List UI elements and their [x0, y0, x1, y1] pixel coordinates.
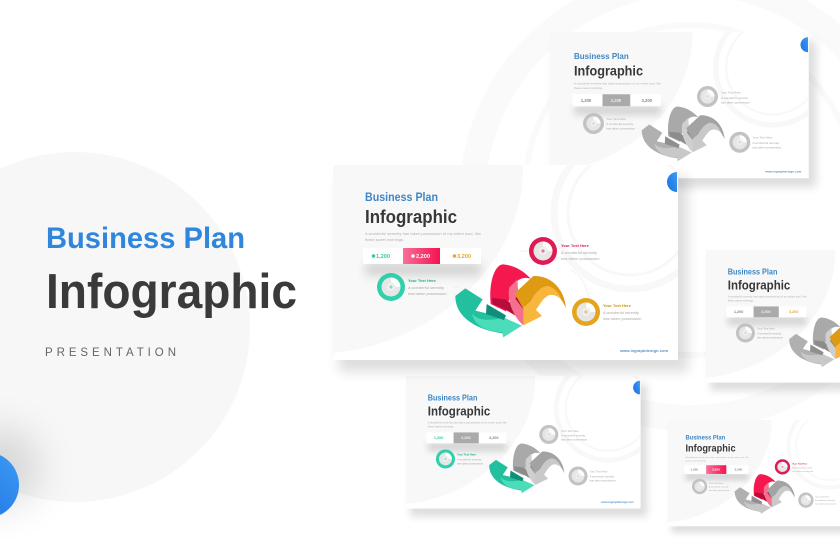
stat row: 2,200: [416, 254, 430, 260]
callout: green: Your Text Here: [408, 278, 437, 283]
callout left: [736, 323, 784, 342]
stat row: 3,200: [789, 310, 798, 314]
callout top: Your Text Here: [561, 429, 579, 433]
stat row: 2,200: [611, 98, 622, 103]
panel: slide thumbnail bottom right (red): [668, 405, 840, 533]
stat row: [363, 248, 481, 264]
callout left: [692, 479, 731, 494]
website: www.ingraphdesign.com: [764, 169, 802, 173]
callout left: has taken possession: [709, 489, 731, 492]
slide description: these sweet mornings.: [428, 425, 454, 429]
callout top: Your Text Here: [721, 90, 741, 95]
slide heading: [428, 393, 490, 418]
arrow graphic: [455, 264, 566, 337]
arrow graphic: [489, 444, 564, 493]
panel: slide thumbnail top right (grey): [550, 11, 830, 187]
website: www.ingraphdesign.com: [619, 348, 668, 353]
stat row: [426, 432, 507, 443]
slide description: these sweet mornings.: [728, 299, 754, 303]
callout: yellow: Your Text Here: [603, 303, 632, 308]
callout top: has taken possession: [561, 438, 588, 442]
callout top: Your Text Here: [792, 463, 808, 466]
callout: yellow: has taken possession: [603, 316, 641, 321]
slide heading: Infographic: [728, 278, 790, 292]
callout left: Your Text Here: [709, 482, 724, 485]
callout: green: [377, 273, 446, 301]
slide heading: [685, 435, 736, 455]
callout left: A wonderful serenity: [757, 331, 782, 335]
callout left: has taken possession: [457, 461, 484, 465]
stat row: 1,200: [581, 98, 592, 103]
callout left: Your Text Here: [606, 117, 626, 121]
callout top: [539, 425, 588, 444]
stat row: 1,200: [434, 436, 443, 440]
stat row: [572, 94, 661, 106]
slide description: these sweet mornings.: [365, 237, 404, 242]
stat row: 1,200: [734, 310, 743, 314]
arrow graphic: [735, 474, 795, 514]
heading: Business Plan: Business Plan: [46, 222, 245, 255]
callout top: has taken possession: [792, 470, 814, 473]
callout right: A wonderful serenity: [590, 474, 615, 478]
callout right: [798, 492, 837, 508]
callout right: Your Text Here: [752, 136, 773, 140]
panel: slide thumbnail middle right (yellow): [706, 231, 840, 391]
callout: yellow: [572, 298, 641, 326]
callout top: A wonderful serenity: [792, 467, 813, 470]
left panel backdrop circle: [0, 152, 250, 502]
callout: green: A wonderful serenity: [408, 285, 444, 290]
callout left: [583, 113, 635, 134]
callout: yellow: A wonderful serenity: [603, 310, 639, 315]
slide heading: [365, 192, 457, 227]
slide description: [365, 231, 481, 242]
slide heading: [728, 267, 790, 292]
stat row: 2,200: [712, 468, 720, 472]
callout right: Your Text Here: [590, 470, 608, 474]
stat row: 3,200: [489, 436, 498, 440]
callout left: has taken possession: [606, 126, 635, 131]
slide heading: Infographic: [574, 63, 643, 79]
callout left: [436, 449, 484, 468]
subtitle: PRESENTATION: PRESENTATION: [45, 347, 176, 359]
stat row: 1,200: [690, 468, 698, 472]
callout left: has taken possession: [757, 335, 784, 339]
callout: green: has taken possession: [408, 291, 446, 296]
slide description: A wonderful serenity has taken possession of my entire soul, like: [428, 421, 507, 425]
stat row: 2,200: [461, 436, 471, 440]
slide heading: Business Plan: [574, 51, 629, 61]
stat row: 3,200: [642, 98, 653, 103]
callout right: Your Text Here: [815, 495, 830, 498]
callout: red: has taken possession: [561, 256, 599, 261]
callout top: [697, 86, 750, 107]
callout right: has taken possession: [590, 478, 616, 482]
slide heading: Infographic: [365, 206, 457, 227]
arrow graphic: [789, 318, 840, 367]
heading: Infographic: Infographic: [46, 265, 297, 319]
slide heading: [574, 51, 643, 78]
blue corner circle with soft shadow: [0, 428, 40, 518]
slide heading: Business Plan: [428, 393, 478, 402]
slide description: A wonderful serenity has taken possession of my entire soul, like: [728, 295, 807, 299]
callout right: A wonderful serenity: [815, 499, 836, 502]
slide heading: Infographic: [685, 444, 736, 455]
slide description: [728, 295, 807, 303]
callout left: A wonderful serenity: [457, 457, 482, 461]
arrow graphic: [642, 106, 725, 161]
callout right: has taken possession: [752, 145, 782, 149]
callout right: A wonderful serenity: [752, 141, 780, 145]
callout: red: [529, 237, 599, 265]
website: www.ingraphdesign.com: [600, 500, 634, 504]
slide description: [428, 421, 507, 429]
callout top: has taken possession: [721, 100, 750, 104]
slide description: A wonderful serenity has taken possession of my entire soul, like: [574, 82, 661, 86]
slide heading: Business Plan: [685, 435, 725, 442]
callout left: Your Text Here: [457, 453, 476, 457]
slide description: [574, 82, 661, 90]
stat row: 3,200: [734, 468, 742, 472]
stat row: [726, 306, 807, 317]
stat row: 2,200: [761, 310, 771, 314]
slide heading: Business Plan: [728, 267, 778, 276]
callout right: [729, 132, 782, 153]
callout left: Your Text Here: [757, 327, 775, 331]
callout top: A wonderful serenity: [721, 96, 749, 100]
panel: slide thumbnail bottom centre (green): [406, 357, 660, 517]
stat row: 3,200: [457, 254, 471, 260]
stat row: 1,200: [376, 254, 390, 260]
callout left: A wonderful serenity: [606, 122, 634, 126]
stat row: [684, 465, 749, 474]
slide description: A wonderful serenity has taken possession of my entire soul, like: [365, 231, 481, 236]
callout left: A wonderful serenity: [709, 486, 729, 489]
callout right: [569, 466, 616, 485]
connector lines: [453, 251, 589, 298]
slide heading: Business Plan: [365, 192, 438, 204]
slide description: A wonderful serenity has taken possession of my entire soul, like: [685, 456, 749, 459]
callout right: has taken possession: [815, 502, 837, 505]
callout top: A wonderful serenity: [561, 434, 586, 438]
panel: main full-colour slide: [333, 137, 706, 372]
callout top: [775, 459, 814, 474]
callout: red: A wonderful serenity: [561, 250, 597, 255]
slide heading: Infographic: [428, 404, 490, 418]
slide description: these sweet mornings.: [685, 459, 707, 462]
callout: red: Your Text Here: [561, 243, 590, 248]
slide description: these sweet mornings.: [574, 86, 603, 90]
background rings: [472, 0, 840, 418]
slide description: [685, 456, 749, 462]
